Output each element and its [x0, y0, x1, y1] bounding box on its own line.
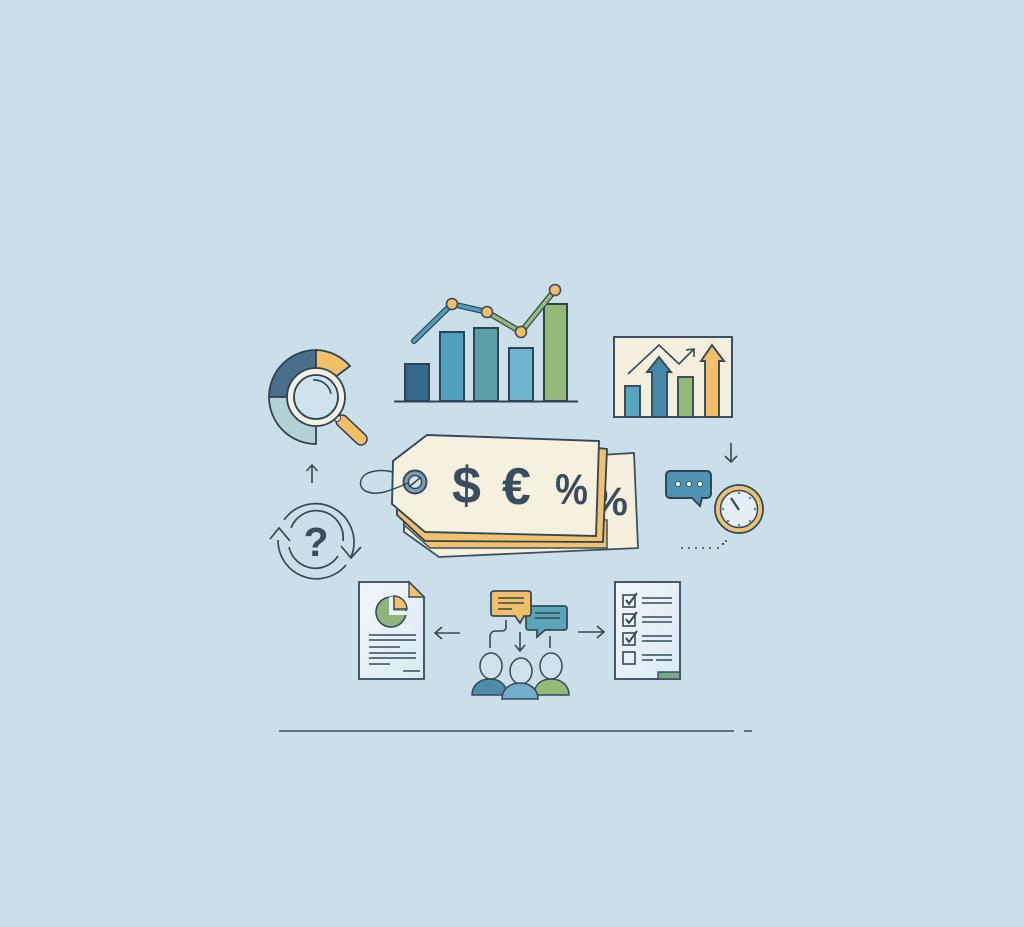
line chart panel with rising arrows: [614, 337, 732, 417]
icon: report document: [359, 582, 424, 679]
icon: team with speech bubbles: [472, 591, 569, 699]
dotted trail: [681, 540, 727, 549]
icon: donut chart with magnifying glass: [269, 350, 361, 444]
arrow: left: [435, 627, 460, 639]
yellow tag upper: [397, 447, 607, 542]
front tag: %: [555, 466, 588, 514]
front tag: €: [501, 458, 531, 516]
icon: checklist: [615, 582, 680, 679]
back tag: %: [592, 480, 628, 524]
tag eyelet and string: [360, 470, 426, 494]
price tags stack: [360, 435, 638, 557]
back tag: [404, 453, 638, 557]
front tag: $: [451, 457, 481, 515]
yellow tag lower: [404, 510, 607, 548]
front tag: [392, 435, 599, 536]
icon: chat bubble: [666, 471, 711, 506]
arrow: up: [306, 465, 318, 483]
arrow: right: [578, 626, 604, 638]
icon: question cycle: ?: [303, 519, 329, 565]
arrow: down: [725, 443, 737, 462]
icon: question cycle: [270, 504, 361, 579]
bar chart with trend line: [394, 284, 578, 402]
icon: clock: [715, 485, 763, 533]
bottom rule: [279, 730, 752, 732]
